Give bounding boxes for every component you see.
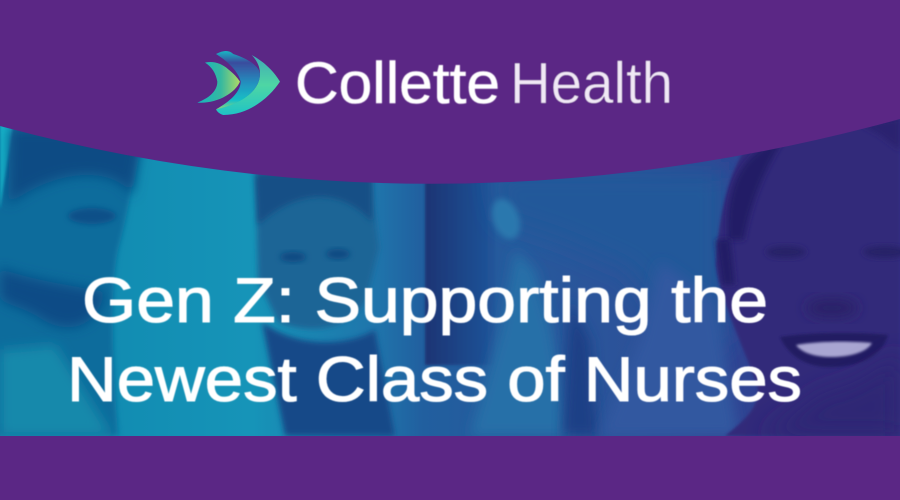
wordmark: Collette — [295, 51, 500, 116]
curved purple header — [0, 0, 900, 184]
left person — [0, 120, 144, 436]
smile — [780, 333, 888, 367]
title — [67, 266, 802, 415]
teeth — [796, 342, 872, 357]
right woman's face — [716, 110, 900, 436]
title: Newest Class of Nurses — [67, 345, 802, 415]
dark window column — [424, 183, 488, 366]
logo: Collette Health — [197, 51, 673, 116]
blurred photo of nurses — [0, 110, 900, 436]
eyes — [766, 246, 806, 258]
second person — [255, 172, 395, 436]
icon: layered chevron fish mark — [197, 51, 280, 115]
third person — [470, 170, 738, 436]
wordmark — [295, 51, 673, 116]
bottom purple band — [0, 436, 900, 500]
nose — [810, 298, 855, 318]
title: Gen Z: Supporting the — [82, 266, 768, 336]
wordmark: Health — [510, 51, 673, 116]
